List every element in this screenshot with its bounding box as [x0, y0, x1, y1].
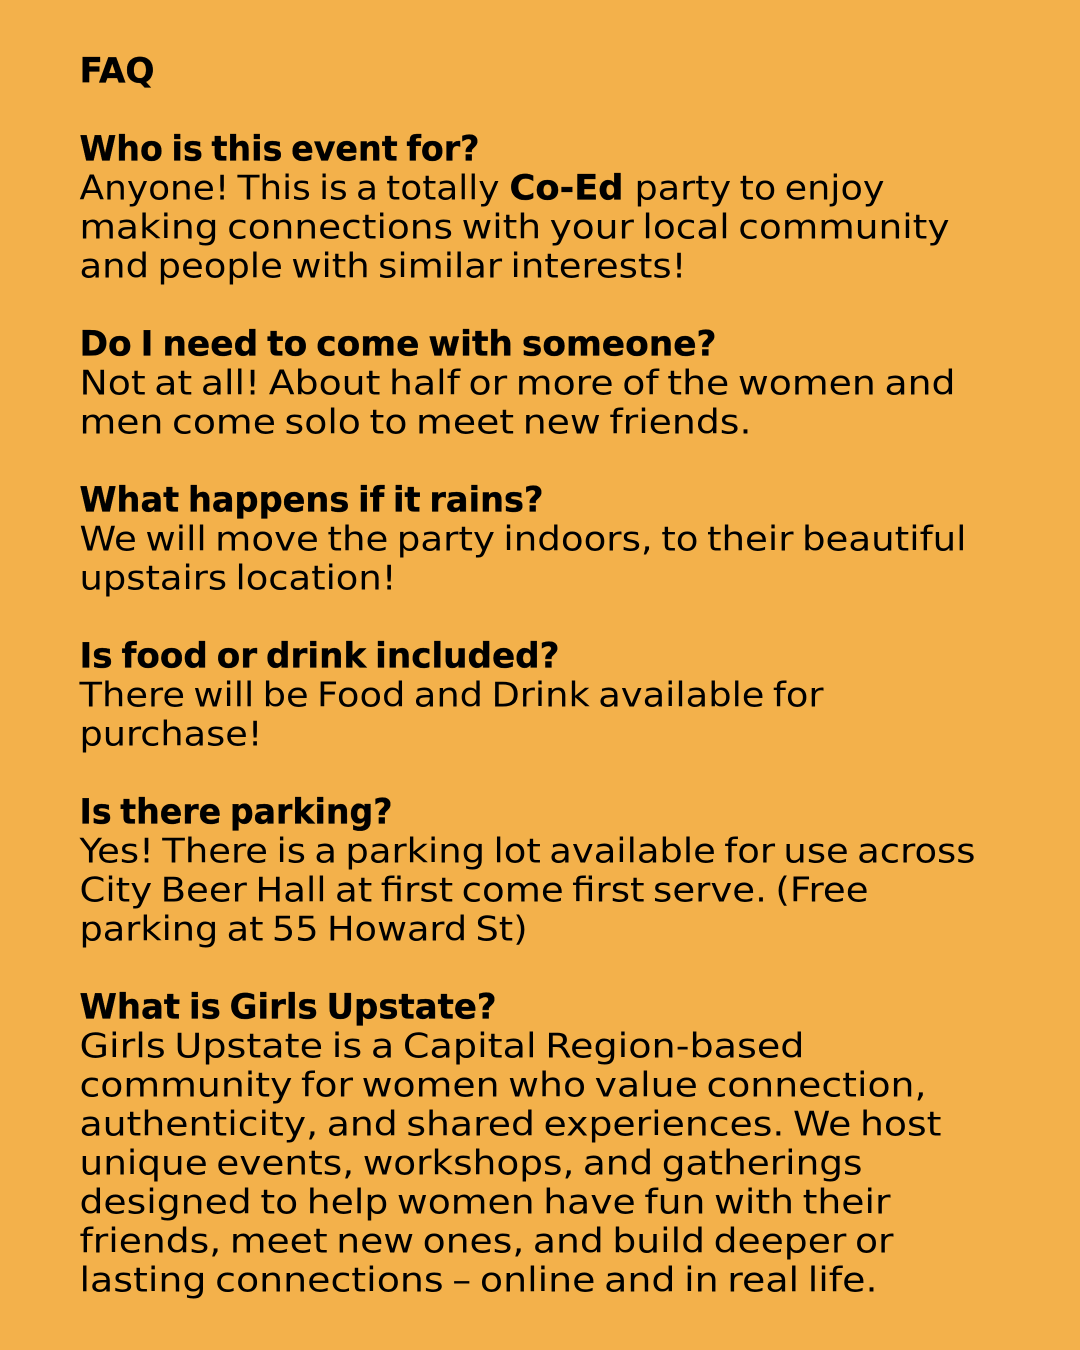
answer [80, 168, 950, 285]
answer: unique events, workshops, and gatherings [80, 1143, 863, 1182]
answer: authenticity, and shared experiences. We host [80, 1104, 942, 1143]
answer: designed to help women have fun with their [80, 1182, 891, 1221]
answer: making connections with your local community [80, 207, 950, 246]
answer: party to enjoy [634, 168, 884, 207]
answer: lasting connections – online and in real life. [80, 1260, 877, 1299]
question: Do I need to come with someone? [80, 324, 716, 364]
question: What happens if it rains? [80, 480, 544, 520]
answer [80, 1026, 942, 1299]
answer: Not at all! About half or more of the women and [80, 363, 955, 402]
question: What is Girls Upstate? [80, 987, 496, 1027]
answer: We will move the party indoors, to their beautiful [80, 519, 966, 558]
answer: and people with similar interests! [80, 246, 686, 285]
answer [78, 675, 824, 753]
answer: Yes! There is a parking lot available for use across [78, 831, 976, 870]
question: Is food or drink included? [80, 636, 560, 676]
FAQ item: do I need to come with someone [80, 324, 955, 441]
FAQ item: is food or drink included [78, 636, 824, 753]
FAQ item: what is Girls Upstate [80, 987, 942, 1299]
answer: purchase! [80, 714, 262, 753]
answer: There will be Food and Drink available for [78, 675, 824, 714]
answer: community for women who value connection, [80, 1065, 926, 1104]
FAQ item: who is this event for [80, 129, 950, 285]
FAQ item: is there parking [78, 792, 976, 948]
answer: Co-Ed [510, 168, 624, 208]
title: FAQ [80, 51, 154, 91]
answer: upstairs location! [80, 558, 396, 597]
answer [80, 363, 955, 441]
FAQ content [78, 51, 976, 1299]
answer [78, 831, 976, 948]
question: Is there parking? [80, 792, 392, 832]
answer: men come solo to meet new friends. [80, 402, 752, 441]
answer: Girls Upstate is a Capital Region-based [80, 1026, 804, 1065]
FAQ item: what happens if it rains [80, 480, 966, 597]
answer: parking at 55 Howard St) [80, 909, 528, 948]
answer [80, 519, 966, 597]
answer: friends, meet new ones, and build deeper or [80, 1221, 894, 1260]
answer: City Beer Hall at first come first serve. (Free [80, 870, 868, 909]
answer: Anyone! This is a totally [80, 168, 500, 207]
question: Who is this event for? [80, 129, 480, 169]
